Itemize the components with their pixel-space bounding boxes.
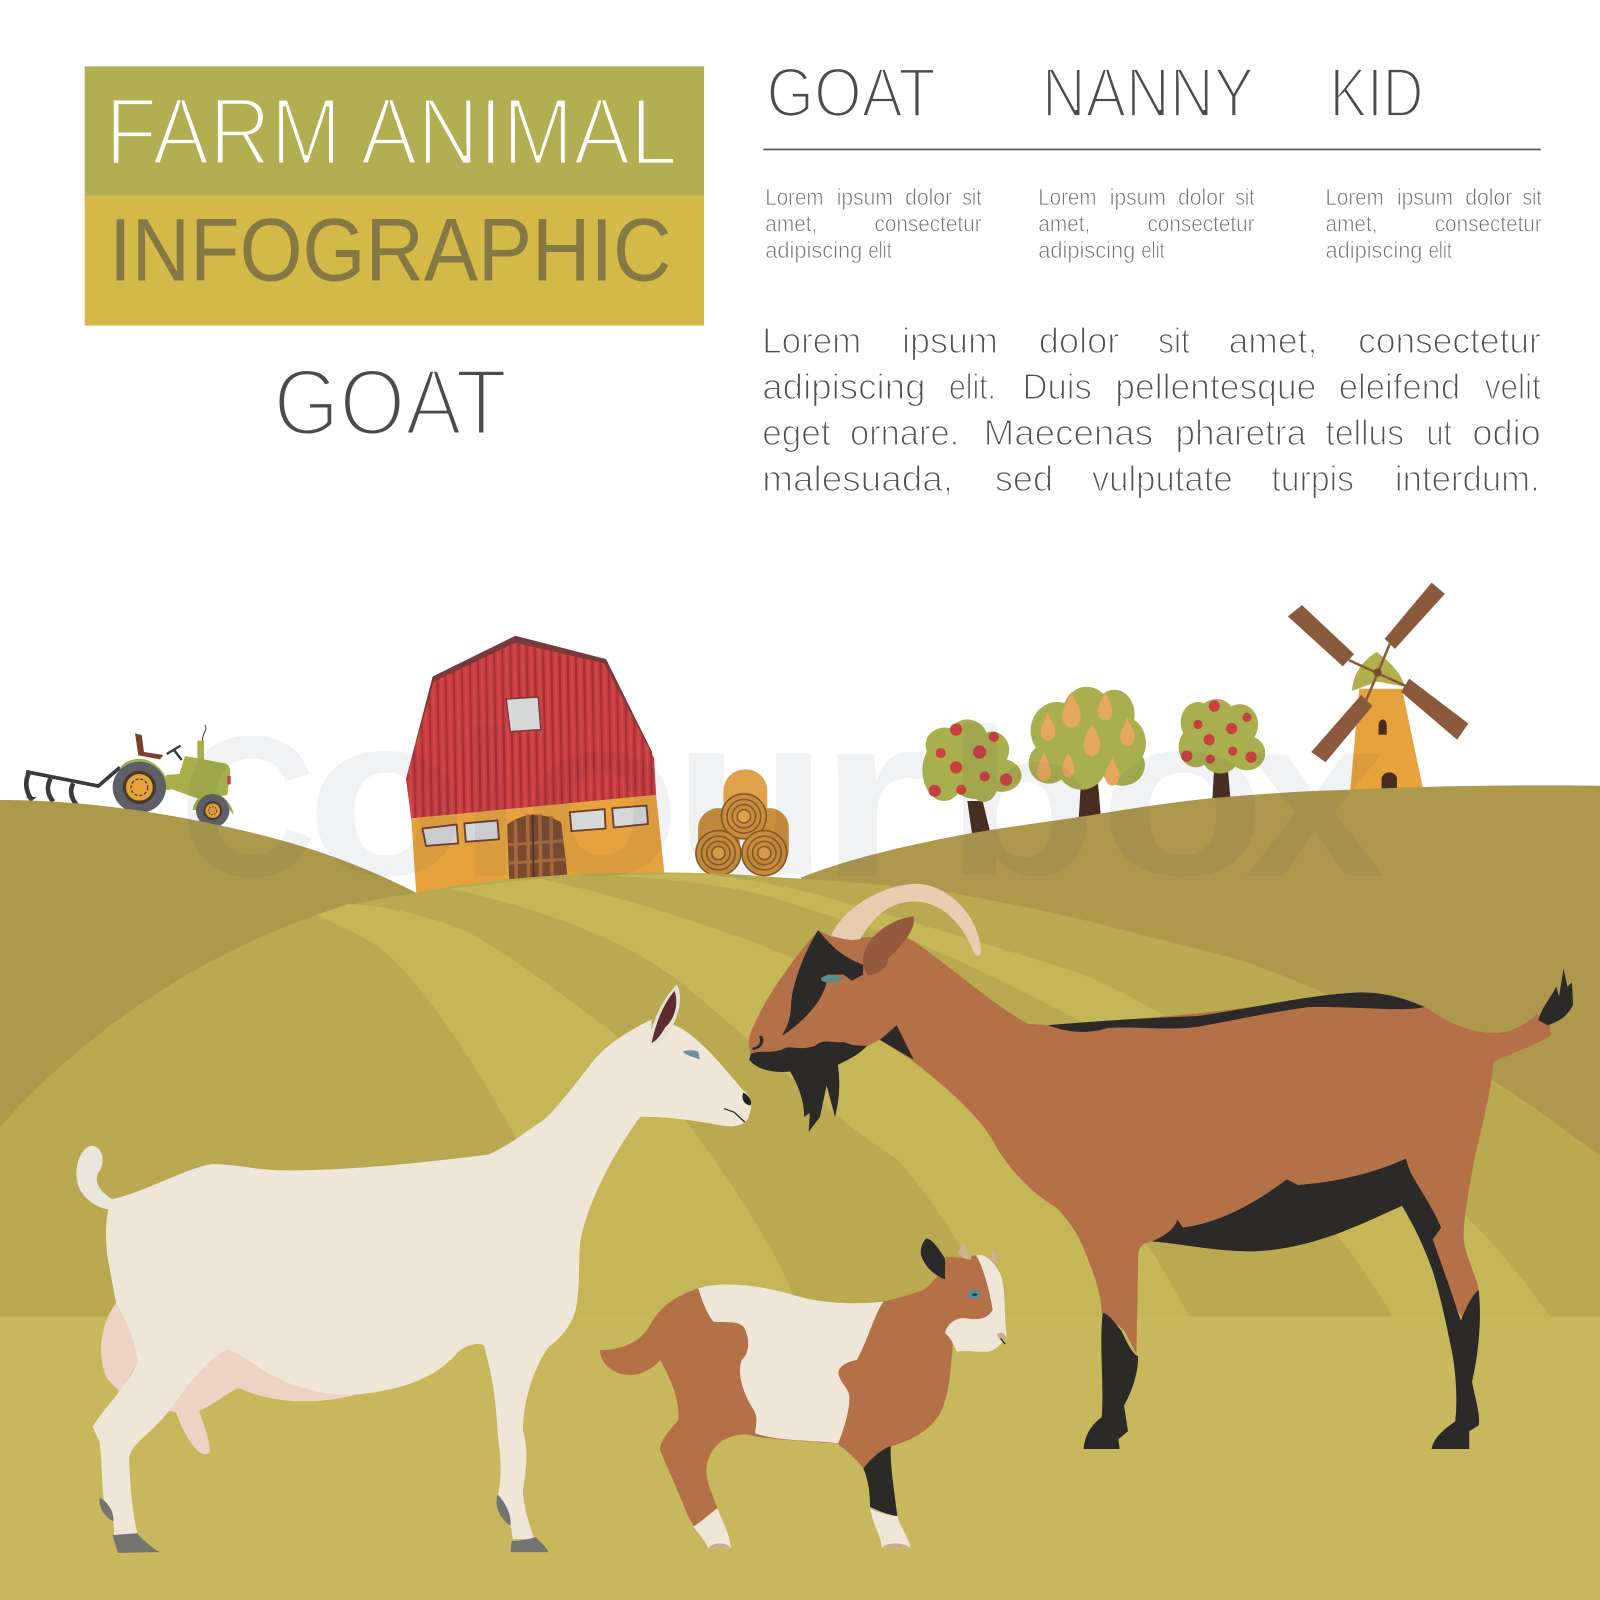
hooves	[99, 1494, 548, 1553]
black foreleg	[863, 1446, 897, 1516]
hooves	[709, 1543, 911, 1548]
text block: nanny column: ipsum	[1110, 184, 1166, 210]
icon: tractor with plough	[26, 725, 234, 827]
text block: kid column: dolor	[1465, 184, 1512, 210]
text block: main paragraph: ipsum	[902, 321, 998, 361]
banner: infographic: INFOGRAPHIC	[109, 201, 671, 300]
watermark: o	[1099, 666, 1266, 923]
body	[600, 1255, 993, 1528]
text block: goat column: dolor	[905, 184, 952, 210]
goat: nanny	[76, 985, 751, 1553]
eye	[967, 1290, 981, 1299]
text block: main paragraph: interdum.	[1395, 459, 1540, 499]
text block: main paragraph: ornare.	[850, 413, 959, 453]
hill: back right	[801, 785, 1600, 1327]
eye	[821, 975, 841, 983]
text block: kid column: adipiscing	[1326, 237, 1422, 263]
text block: main paragraph: eleifend	[1339, 367, 1460, 407]
text block: main paragraph: dolor	[1039, 321, 1119, 361]
icon: hay bales	[696, 769, 789, 876]
watermark: o	[306, 666, 467, 923]
watermark	[180, 666, 1386, 925]
face stripe	[782, 930, 863, 1036]
horns	[958, 1243, 998, 1263]
text block: main paragraph: amet,	[1229, 321, 1317, 361]
white saddle patch	[698, 1285, 883, 1443]
text block: goat column: adipiscing	[765, 237, 862, 263]
text block: main paragraph: odio	[1472, 413, 1541, 453]
text block: main paragraph: ut	[1427, 413, 1452, 453]
text block: main paragraph: elit.	[949, 367, 996, 407]
text block: goat column: consectetur	[874, 211, 982, 237]
icon: barn	[406, 636, 664, 894]
column headings: goat nanny kid: KID	[1330, 53, 1423, 131]
text block: main paragraph: pharetra	[1176, 413, 1306, 453]
nose	[997, 1333, 1006, 1344]
text block: nanny column: consectetur	[1147, 211, 1255, 237]
front leg	[1084, 1313, 1138, 1449]
beard	[749, 1042, 867, 1132]
text block: kid column: amet,	[1326, 211, 1378, 237]
text block: kid column: ipsum	[1397, 184, 1453, 210]
text block: kid column: Lorem	[1326, 184, 1384, 210]
goat: billy	[749, 884, 1573, 1449]
nose and mouth	[743, 1092, 751, 1105]
icon: windmill	[1288, 583, 1468, 794]
icon: apple tree left	[922, 719, 1021, 837]
body	[749, 930, 1551, 1354]
column headings: goat nanny kid: NANNY	[1042, 53, 1254, 131]
text block: main paragraph: sed	[995, 459, 1053, 499]
text block: goat column: amet,	[765, 211, 817, 237]
text block: kid column: sit	[1522, 184, 1542, 210]
text block: main paragraph: eget	[762, 413, 831, 453]
rear udder	[101, 1302, 137, 1415]
tail	[76, 1146, 112, 1210]
ear	[649, 985, 680, 1045]
watermark: o	[523, 666, 681, 923]
watermark: l	[459, 688, 522, 921]
text block: main paragraph: tellus	[1326, 413, 1404, 453]
text block: nanny column	[1038, 184, 1255, 263]
text block: nanny column: sit	[1235, 184, 1255, 210]
title panel: farm animal infographic	[85, 66, 704, 326]
text block: main paragraph: Lorem	[762, 321, 861, 361]
text block: main paragraph: turpis	[1271, 459, 1354, 499]
field: striped dome	[0, 872, 1600, 1327]
text block: main paragraph: malesuada,	[762, 459, 953, 499]
barn door	[507, 814, 567, 880]
white face	[945, 1255, 1007, 1352]
text block: goat column: sit	[962, 184, 982, 210]
feet	[693, 1508, 911, 1548]
text block: main paragraph: consectetur	[1358, 321, 1541, 361]
text block: nanny column: adipiscing	[1038, 237, 1135, 263]
goat: kid	[600, 1238, 1007, 1548]
text block: nanny column: Lorem	[1038, 184, 1096, 210]
ground	[0, 1316, 1600, 1600]
watermark: b	[946, 686, 1097, 919]
body	[93, 1019, 751, 1539]
neck patch	[880, 1025, 914, 1060]
heading: goat: GOAT	[273, 350, 507, 455]
text block: main paragraph: vulputate	[1092, 459, 1233, 499]
icon: apple tree right	[1179, 699, 1265, 802]
banner: farm animal: FARM ANIMAL	[105, 78, 678, 185]
front udder	[169, 1349, 355, 1454]
text block: kid column: consectetur	[1435, 211, 1542, 237]
text block: nanny column: elit	[1141, 237, 1165, 263]
text block: main paragraph: velit	[1485, 367, 1541, 407]
ear	[863, 916, 914, 975]
watermark: u	[673, 666, 829, 923]
belly and rear leg	[1152, 1158, 1480, 1449]
text block: main paragraph	[762, 321, 1541, 499]
text block: goat column: elit	[868, 237, 892, 263]
text block: main paragraph: pellentesque	[1115, 367, 1316, 407]
text block: kid column: elit	[1429, 237, 1452, 263]
text block: main paragraph: adipiscing	[762, 367, 926, 407]
eye	[683, 1050, 700, 1060]
icon: pear tree	[1029, 687, 1146, 821]
text block: main paragraph: Duis	[1022, 367, 1092, 407]
hill: back left	[0, 800, 416, 1327]
watermark: C	[180, 696, 316, 919]
watermark: x	[1245, 668, 1386, 925]
column headings: goat nanny kid	[766, 53, 1423, 131]
text block: kid column	[1326, 184, 1542, 263]
text block: goat column	[765, 184, 982, 263]
horn	[831, 884, 981, 956]
tail tuft	[1538, 969, 1573, 1025]
text block: main paragraph: sit	[1158, 321, 1190, 361]
watermark: r	[818, 668, 929, 925]
text block: goat column: Lorem	[765, 184, 823, 210]
column headings: goat nanny kid: GOAT	[766, 53, 936, 131]
text block: nanny column: amet,	[1038, 211, 1090, 237]
nostril	[753, 1036, 762, 1049]
text block: goat column: ipsum	[837, 184, 893, 210]
back saddle	[1048, 992, 1424, 1032]
text block: nanny column: dolor	[1178, 184, 1225, 210]
ear	[921, 1238, 945, 1279]
text block: main paragraph: Maecenas	[984, 413, 1153, 453]
